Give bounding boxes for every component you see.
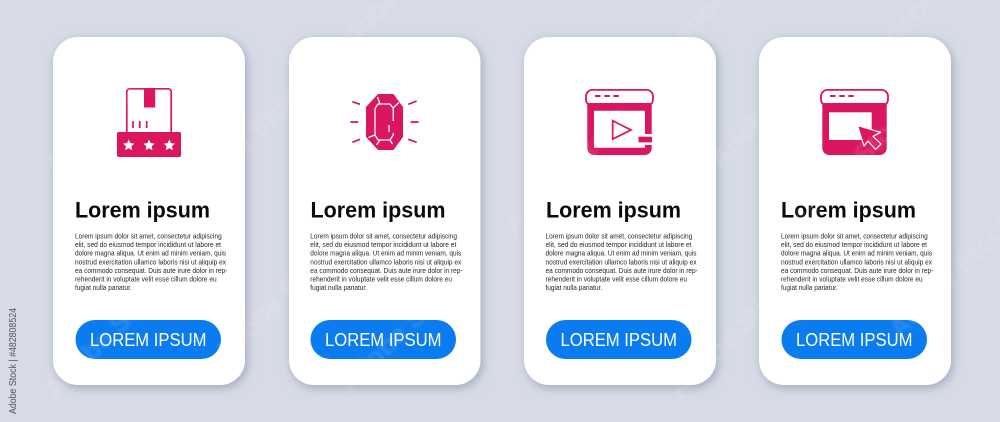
button xyxy=(76,320,221,359)
text block: elit, sed do eiusmod tempor incididunt ut labore et xyxy=(546,240,692,249)
text block: rehenderit in voluptate velit esse cillum dolore eu xyxy=(781,274,923,283)
text block: ea commodo consequat. Duis aute irure dolor in rep- xyxy=(546,266,698,275)
text block: nostrud exercitation ullamco laboris nisi ut aliquip ex xyxy=(310,257,462,266)
text block: fugiat nulla pariatur. xyxy=(546,283,602,292)
panel: card 3 xyxy=(524,37,716,385)
text block xyxy=(546,232,698,292)
text block: Lorem ipsum dolor sit amet, consectetur adipiscing xyxy=(310,232,457,240)
watermark: Adobe Stock xyxy=(38,41,177,179)
button xyxy=(310,320,456,359)
heading: Lorem ipsum xyxy=(75,198,210,222)
button: LOREM IPSUM xyxy=(796,330,912,350)
watermark: Adobe Stock xyxy=(38,266,177,404)
panel: card 1 xyxy=(53,37,245,385)
watermark: Adobe Stock xyxy=(178,71,317,209)
text block: Lorem ipsum dolor sit amet, consectetur adipiscing xyxy=(75,232,222,240)
watermark: Adobe Stock xyxy=(498,101,637,239)
text block: dolore magna aliqua. Ut enim ad minim veniam, quis xyxy=(310,249,462,258)
text block: Lorem ipsum dolor sit amet, consectetur adipiscing xyxy=(546,232,692,240)
text block: fugiat nulla pariatur. xyxy=(781,283,838,292)
button xyxy=(546,320,692,359)
text block: nostrud exercitation ullamco laboris nisi ut aliquip ex xyxy=(75,257,226,266)
text block: elit, sed do eiusmod tempor incididunt ut labore et xyxy=(310,240,457,249)
text block: elit, sed do eiusmod tempor incididunt ut labore et xyxy=(75,240,222,249)
text block: rehenderit in voluptate velit esse cillum dolore eu xyxy=(546,274,687,283)
icon: glowing gem xyxy=(350,94,419,150)
button: LOREM IPSUM xyxy=(560,330,677,350)
text block: fugiat nulla pariatur. xyxy=(310,283,367,292)
text block: dolore magna aliqua. Ut enim ad minim veniam, quis xyxy=(75,249,226,258)
panel: card 4 xyxy=(759,37,951,385)
button xyxy=(782,320,927,359)
text block: ea commodo consequat. Duis aute irure dolor in rep- xyxy=(781,266,934,275)
text block: Lorem ipsum dolor sit amet, consectetur adipiscing xyxy=(781,232,928,240)
watermark: Adobe Stock xyxy=(208,231,347,369)
panel: card 2 xyxy=(289,37,480,385)
text block: rehenderit in voluptate velit esse cillum dolore eu xyxy=(75,274,217,283)
text block xyxy=(75,232,228,292)
text block: nostrud exercitation ullamco laboris nisi ut aliquip ex xyxy=(546,257,697,266)
text block: dolore magna aliqua. Ut enim ad minim veniam, quis xyxy=(781,249,932,258)
text block: ea commodo consequat. Duis aute irure dolor in rep- xyxy=(75,266,228,275)
text block: rehenderit in voluptate velit esse cillum dolore eu xyxy=(310,274,452,283)
text block: fugiat nulla pariatur. xyxy=(75,283,132,292)
watermark: Adobe Stock xyxy=(663,266,802,404)
watermark: Adobe Stock xyxy=(703,36,842,174)
text block: elit, sed do eiusmod tempor incididunt ut labore et xyxy=(781,240,928,249)
text block: ea commodo consequat. Duis aute irure dolor in rep- xyxy=(310,266,463,275)
watermark: Adobe Stock xyxy=(333,261,472,399)
button: LOREM IPSUM xyxy=(90,330,206,350)
stock credit: Adobe Stock | #482808524 xyxy=(8,308,19,414)
watermark: Adobe Stock xyxy=(783,96,922,234)
heading: Lorem ipsum xyxy=(310,198,446,222)
icon: video player window xyxy=(586,90,653,155)
heading: Lorem ipsum xyxy=(546,198,681,222)
text block: nostrud exercitation ullamco laboris nisi ut aliquip ex xyxy=(781,257,932,266)
text block: dolore magna aliqua. Ut enim ad minim veniam, quis xyxy=(546,249,697,258)
button: LOREM IPSUM xyxy=(325,330,442,350)
icon: browser window with cursor xyxy=(821,90,888,155)
text block xyxy=(781,232,934,292)
heading: Lorem ipsum xyxy=(781,198,916,222)
text block xyxy=(310,232,463,292)
icon: package with star rating xyxy=(117,88,181,157)
